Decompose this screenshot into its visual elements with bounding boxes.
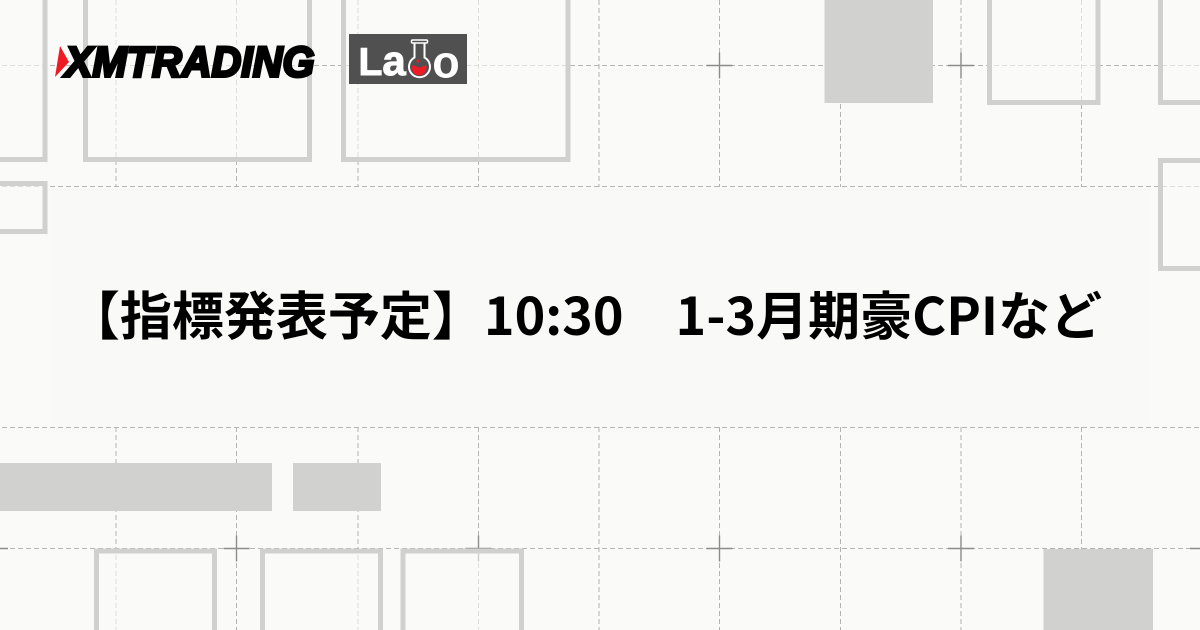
logo: Lab: La	[358, 37, 406, 84]
logo: XMTRADING: XMTRADING	[63, 38, 315, 86]
logo: Lab	[349, 34, 467, 88]
title: 【指標発表予定】10:30 1-3月期豪CPIなど	[68, 275, 1102, 350]
icon: flask	[409, 40, 430, 77]
logo: Lab: o	[432, 36, 460, 88]
